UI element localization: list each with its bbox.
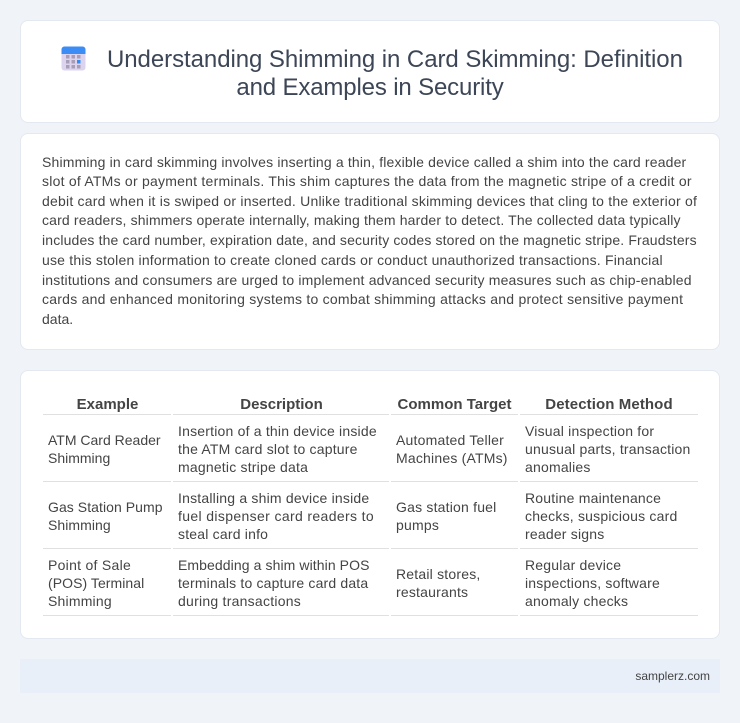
footer source text: samplerz.com <box>635 669 710 683</box>
table row: ATM: Visual inspection for <box>525 423 654 439</box>
table row: gas station: Gas station fuel <box>396 499 496 515</box>
text block: shimming explanation: data. <box>42 311 73 327</box>
table header: Example <box>77 396 138 413</box>
table row: point of sale: terminals to capture card data <box>178 575 368 591</box>
panel: examples table <box>20 370 720 639</box>
table row: ATM: Insertion of a thin device inside <box>178 423 377 439</box>
text block: shimming explanation: card readers, shimmers operate internally, making them harder to detect. The collected data typically <box>42 212 681 228</box>
table row: point of sale: inspections, software <box>525 575 660 591</box>
footer bar <box>20 659 720 693</box>
text block: shimming explanation: includes the card number, expiration date, and security codes stored on the magnetic stripe. Fraudsters <box>42 232 697 248</box>
table row: point of sale: anomaly checks <box>525 593 628 609</box>
text block: shimming explanation: Shimming in card skimming involves inserting a thin, flexible device called a shim into the card reader <box>42 154 686 170</box>
table row: point of sale: (POS) Terminal <box>48 575 144 591</box>
text block: shimming explanation: use this stolen information to create cloned cards or conduct unauthorized transactions. Financial <box>42 252 663 268</box>
text block: shimming explanation <box>42 154 697 327</box>
table row: point of sale: restaurants <box>396 584 468 600</box>
text block: shimming explanation: slot of ATMs or payment terminals. This shim captures the data from the magnetic stripe of a credit or <box>42 173 692 189</box>
table row: gas station: Installing a shim device inside <box>178 490 369 506</box>
title <box>107 46 683 101</box>
table row: point of sale: Retail stores, <box>396 566 480 582</box>
table row: ATM: the ATM card slot to capture <box>178 441 358 457</box>
table header: Common Target <box>398 396 511 413</box>
panel: intro paragraph <box>20 133 720 350</box>
panel: title header <box>20 20 720 123</box>
table row: ATM: Automated Teller <box>396 432 504 448</box>
table row: gas station: checks, suspicious card <box>525 508 677 524</box>
text block: shimming explanation: cards and enhanced monitoring systems to combat shimming attacks and protect sensitive payment <box>42 291 683 307</box>
table row: gas station: fuel dispenser card readers to <box>178 508 374 524</box>
table header: Description <box>240 396 323 413</box>
table header: Detection Method <box>545 396 673 413</box>
table row: ATM: anomalies <box>525 459 591 475</box>
table row: gas station: pumps <box>396 517 439 533</box>
table row: ATM: magnetic stripe data <box>178 459 308 475</box>
table row: point of sale: during transactions <box>178 593 301 609</box>
table header <box>43 396 698 415</box>
text block: shimming explanation: institutions and consumers are urged to implement advanced security measures such as chip-enabled <box>42 272 692 288</box>
table row: point of sale: Point of Sale <box>48 557 131 573</box>
table row: point of sale: Embedding a shim within POS <box>178 557 370 573</box>
title: Understanding Shimming in Card Skimming: Definition <box>107 46 683 73</box>
table row: ATM: Machines (ATMs) <box>396 450 508 466</box>
table row: gas station: Shimming <box>48 517 111 533</box>
table row: gas station: Routine maintenance <box>525 490 661 506</box>
table row: ATM: Shimming <box>48 450 110 466</box>
text block: shimming explanation: debit card when it is swiped or inserted. Unlike traditional skimming devices that cling to the exterior of <box>42 193 697 209</box>
table row: point of sale: Shimming <box>48 593 112 609</box>
table row: gas station: reader signs <box>525 526 604 542</box>
table row: point of sale: Regular device <box>525 557 621 573</box>
table row: gas station: steal card info <box>178 526 268 542</box>
table row: ATM: unusual parts, transaction <box>525 441 691 457</box>
table row: gas station <box>43 490 698 549</box>
table row: ATM <box>43 423 698 482</box>
table row: gas station: Gas Station Pump <box>48 499 163 515</box>
table row: ATM: ATM Card Reader <box>48 432 161 448</box>
title: and Examples in Security <box>236 74 504 101</box>
table row: point of sale <box>43 557 698 616</box>
icon: calendar grid <box>62 46 86 70</box>
